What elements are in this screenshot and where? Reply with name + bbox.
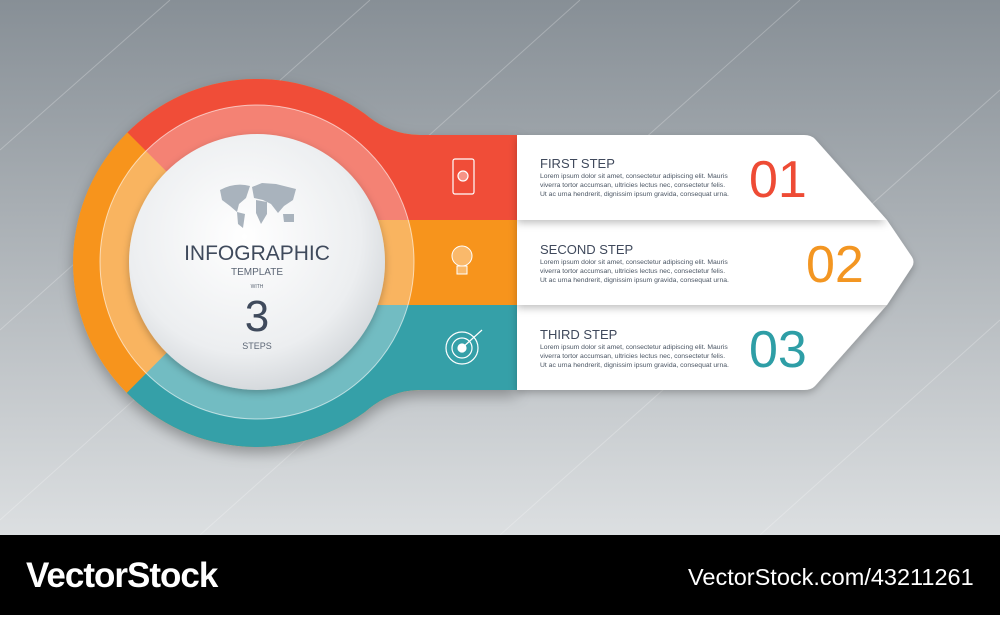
card 2: Ut ac urna hendrerit, dignissim ipsum gravida, consequat urna.	[540, 277, 729, 284]
card 2: viverra tortor accumsan, ultricies lectus nec, consectetur felis.	[540, 268, 725, 275]
footer bar: VectorStock	[26, 556, 219, 595]
center circle: STEPS	[242, 341, 272, 351]
main colored shape	[66, 78, 523, 460]
glass ring	[100, 105, 414, 419]
center circle	[129, 134, 385, 390]
card 2	[517, 220, 914, 305]
card 1: 01	[749, 151, 807, 209]
card 2: 02	[806, 236, 864, 294]
card 3: viverra tortor accumsan, ultricies lectus nec, consectetur felis.	[540, 353, 725, 360]
card 2: Lorem ipsum dolor sit amet, consectetur adipiscing elit. Mauris	[540, 259, 728, 266]
icon: tablet chart	[453, 159, 474, 194]
circle title text: INFOGRAPHIC	[184, 242, 330, 265]
card 3: THIRD STEP	[540, 327, 617, 342]
card 2: SECOND STEP	[540, 242, 633, 257]
card 3: Ut ac urna hendrerit, dignissim ipsum gravida, consequat urna.	[540, 362, 729, 369]
card 3	[517, 305, 887, 390]
card 3: Lorem ipsum dolor sit amet, consectetur adipiscing elit. Mauris	[540, 344, 728, 351]
footer bar: VectorStock.com/43211261	[688, 564, 974, 590]
icon: light bulb	[452, 246, 472, 274]
card 1: Lorem ipsum dolor sit amet, consectetur adipiscing elit. Mauris	[540, 173, 728, 180]
card 1	[517, 135, 887, 220]
card 1: viverra tortor accumsan, ultricies lectus nec, consectetur felis.	[540, 182, 725, 189]
card 3: 03	[749, 321, 807, 379]
card 1: FIRST STEP	[540, 156, 615, 171]
footer bar	[0, 535, 1000, 615]
icon: target	[446, 330, 482, 364]
center circle: WITH	[251, 284, 264, 290]
center circle: 3	[245, 292, 269, 341]
icon: world map	[220, 183, 296, 228]
card 1: Ut ac urna hendrerit, dignissim ipsum gravida, consequat urna.	[540, 191, 729, 198]
center circle: TEMPLATE	[231, 267, 283, 278]
